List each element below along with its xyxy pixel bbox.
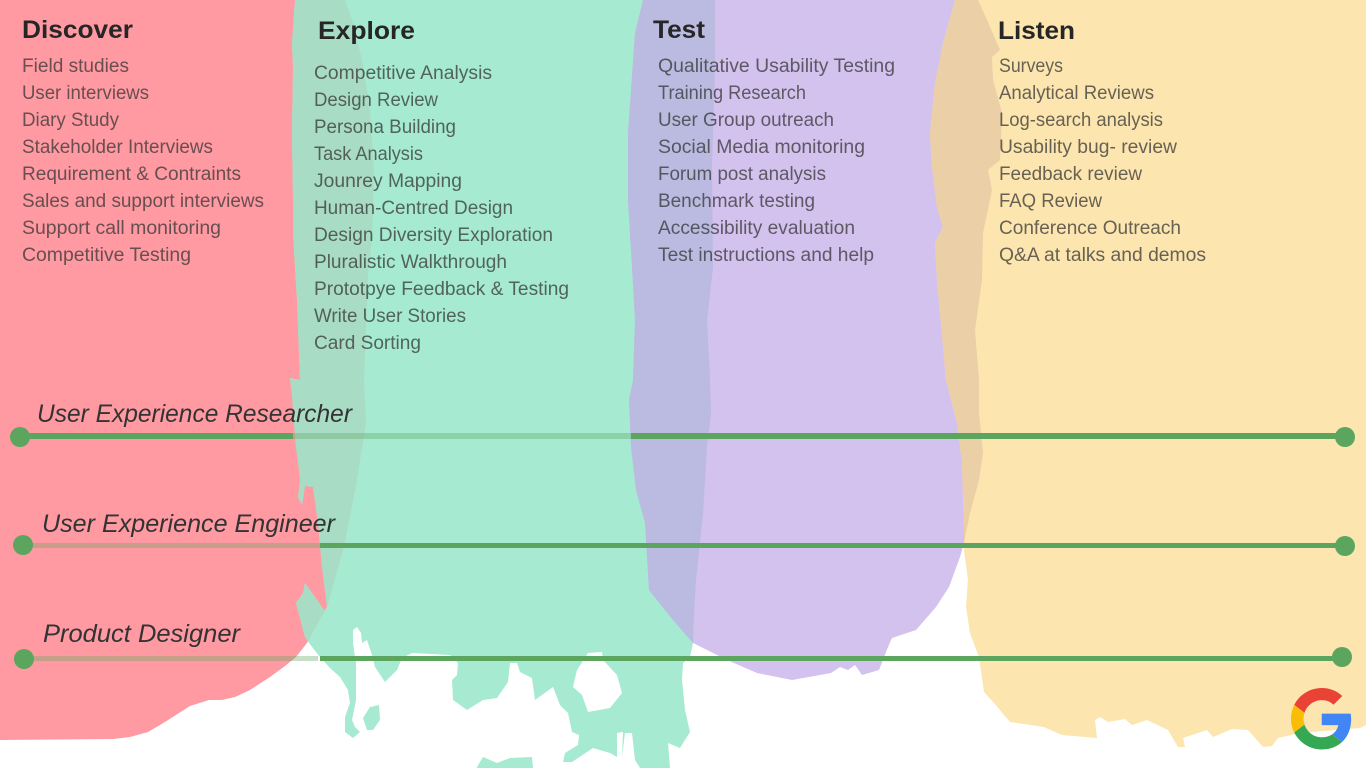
list: Test methods: Benchmark testing — [658, 191, 815, 212]
list: Discover methods: Competitive Testing — [22, 245, 191, 266]
list: Discover methods: Support call monitoring — [22, 218, 221, 239]
role label: User Experience Researcher: User Experience Researcher — [37, 400, 354, 428]
column: Explore — [314, 17, 569, 354]
list: Explore methods: Human-Centred Design — [314, 198, 513, 219]
list: Explore methods: Design Review — [314, 90, 438, 111]
panel: Discover paint swatch — [0, 0, 374, 740]
overlap: Test and Listen — [930, 0, 1002, 542]
list: Explore methods: Persona Building — [314, 117, 456, 138]
list: Test methods: Social Media monitoring — [658, 137, 865, 158]
heading: Explore: Explore — [318, 17, 415, 45]
list: Discover methods — [22, 56, 264, 266]
list: Test methods: Accessibility evaluation — [658, 218, 855, 239]
role line: User Experience Engineer — [13, 535, 1355, 556]
list: Test methods: Training Research — [658, 83, 806, 104]
list: Listen methods: Log-search analysis — [999, 110, 1163, 131]
list: Explore methods: Prototpye Feedback & Testing — [314, 279, 569, 300]
heading: Test: Test — [653, 16, 706, 44]
list: Listen methods — [999, 56, 1206, 266]
overlap: Explore and Test — [628, 0, 715, 643]
list: Discover methods: Sales and support interviews — [22, 191, 264, 212]
list: Explore methods — [314, 63, 569, 354]
panel: Listen paint swatch — [930, 0, 1366, 747]
list: Test methods: Forum post analysis — [658, 164, 826, 185]
list: Explore methods: Jounrey Mapping — [314, 171, 462, 192]
role line: User Experience Researcher — [10, 427, 1355, 447]
list: Listen methods: FAQ Review — [999, 191, 1102, 212]
list: Explore methods: Task Analysis — [314, 144, 423, 165]
list: Explore methods: Competitive Analysis — [314, 63, 492, 84]
list: Discover methods: Requirement & Contraints — [22, 164, 241, 185]
list: Listen methods: Feedback review — [999, 164, 1142, 185]
list: Test methods: User Group outreach — [658, 110, 834, 131]
panel: Explore paint swatch — [290, 0, 715, 768]
list: Discover methods: Field studies — [22, 56, 129, 77]
column: Test — [653, 16, 895, 266]
role label: Product Designer: Product Designer — [43, 620, 242, 648]
column: Discover — [22, 16, 264, 266]
list: Discover methods: Diary Study — [22, 110, 119, 131]
list: Explore methods: Card Sorting — [314, 333, 421, 354]
list: Discover methods: Stakeholder Interviews — [22, 137, 213, 158]
list: Explore methods: Design Diversity Exploration — [314, 225, 553, 246]
role label: User Experience Engineer: User Experience Engineer — [42, 510, 337, 538]
role line: Product Designer — [14, 647, 1352, 669]
list: Listen methods: Conference Outreach — [999, 218, 1181, 239]
list: Listen methods: Analytical Reviews — [999, 83, 1154, 104]
icon: Google G logo — [1291, 688, 1351, 749]
panel: Test paint swatch — [628, 0, 1002, 680]
heading: Listen: Listen — [998, 17, 1075, 45]
list: Explore methods: Pluralistic Walkthrough — [314, 252, 507, 273]
list: Explore methods: Write User Stories — [314, 306, 466, 327]
list: Test methods: Test instructions and help — [658, 245, 874, 266]
list: Test methods: Qualitative Usability Testing — [658, 56, 895, 77]
overlap: Discover and Explore — [290, 0, 374, 642]
heading: Discover: Discover — [22, 16, 133, 44]
list: Discover methods: User interviews — [22, 83, 149, 104]
list: Listen methods: Q&A at talks and demos — [999, 245, 1206, 266]
column: Listen — [998, 17, 1206, 266]
list: Listen methods: Surveys — [999, 56, 1063, 77]
list: Test methods — [658, 56, 895, 266]
list: Listen methods: Usability bug- review — [999, 137, 1177, 158]
